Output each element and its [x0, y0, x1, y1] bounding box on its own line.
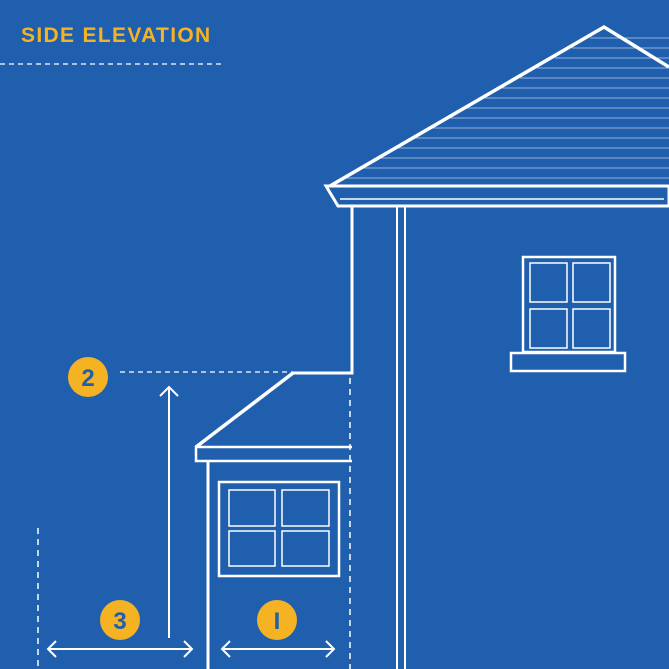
marker 1: [257, 600, 297, 640]
annex roof: [196, 373, 352, 669]
marker 3: [100, 600, 140, 640]
downpipe: [397, 206, 405, 669]
main roof: [326, 27, 669, 206]
arrow 1: [222, 641, 334, 657]
arrow 3: [48, 641, 192, 657]
title: SIDE ELEVATION: [21, 24, 211, 47]
marker 3: 3: [113, 608, 127, 635]
marker 2: 2: [81, 365, 95, 392]
height arrow: [160, 387, 178, 638]
marker 1: I: [274, 608, 280, 635]
annex window: [219, 482, 339, 576]
main wall: [293, 206, 352, 373]
marker 2: [68, 357, 108, 397]
main window: [511, 257, 625, 371]
